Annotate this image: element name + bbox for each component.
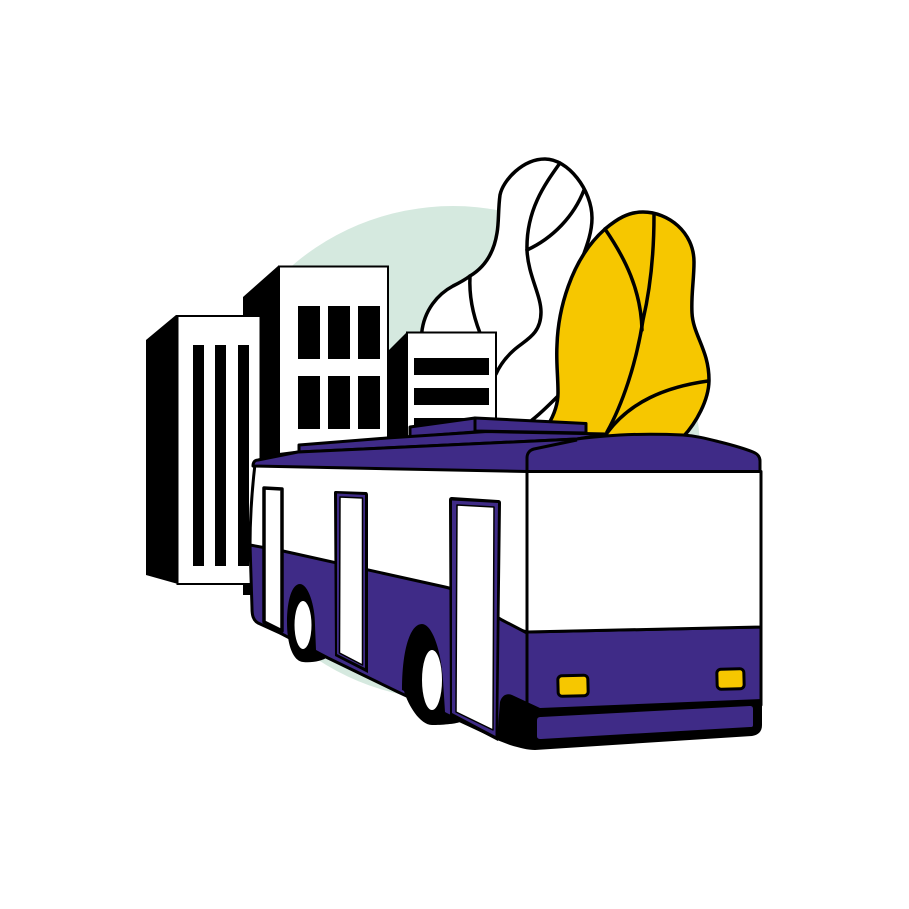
roof equipment — [299, 418, 607, 452]
background circle — [206, 206, 700, 700]
bus rear lower panel — [527, 627, 761, 716]
bumper — [497, 694, 762, 750]
building: short block — [389, 332, 496, 442]
roof — [253, 434, 760, 472]
door 2 — [334, 491, 368, 673]
rear wheel — [287, 584, 328, 662]
building: left tower — [146, 315, 262, 595]
door 1 — [264, 488, 282, 631]
bus — [250, 418, 762, 750]
bus rear white panel — [527, 472, 761, 632]
bus side lower panel — [250, 545, 527, 745]
yellow tree — [548, 212, 709, 437]
roof front cap seam — [527, 440, 577, 471]
headlight right — [717, 669, 744, 689]
bus side body white — [250, 464, 527, 632]
building: middle tower — [243, 266, 388, 470]
door 3 — [449, 497, 501, 741]
front wheel — [402, 624, 460, 725]
headlight left — [558, 675, 588, 696]
white tree — [422, 159, 592, 425]
